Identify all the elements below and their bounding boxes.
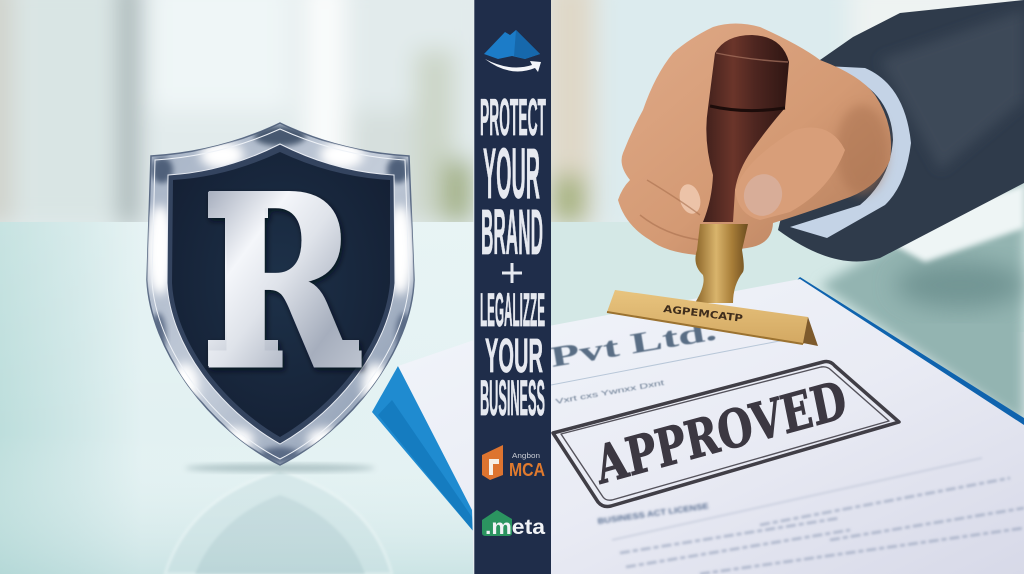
document: folder and paper: [372, 277, 1024, 574]
icon: blue mountain logo: [484, 30, 541, 72]
thumb: [735, 128, 845, 220]
logo: meta: [482, 510, 545, 539]
stamp base: AGPEMCATP: [663, 304, 743, 325]
infographic canvas: YOUR: [485, 330, 543, 383]
infographic canvas: YOUR: [483, 135, 540, 214]
heading: protect your brand: [480, 89, 546, 268]
infographic canvas: PROTECT: [480, 89, 546, 147]
approved stamp: APPROVED: [590, 369, 852, 497]
blue folder edge: [372, 366, 474, 532]
stamp handle: [703, 35, 789, 222]
paper sheet: [398, 279, 1024, 574]
logo: MCA: MCA: [509, 460, 545, 480]
sleeve and shirt cuff: [778, 0, 1024, 262]
infographic canvas: BRAND: [481, 196, 543, 268]
stamp base: [607, 290, 818, 346]
heading: legalize your business: [480, 283, 545, 426]
logo: MCA: Anɡbon: [512, 451, 540, 460]
document body text: [597, 458, 1024, 574]
logo: meta: .meta: [485, 516, 545, 539]
shield metal frame: [147, 123, 414, 465]
shield: [146, 123, 414, 472]
shield dark face: [167, 144, 395, 444]
company name: Pvt Ltd.: [548, 316, 719, 374]
infographic canvas: BUSINESS: [480, 370, 545, 426]
fine print under name: Vxrt cxs Ywnxx Dxnt: [555, 380, 665, 406]
hand holding stamp: [618, 24, 891, 303]
index fingernail: [676, 182, 704, 216]
logo: MCA: [482, 445, 545, 480]
infographic canvas: LEGALIZZE: [480, 283, 545, 336]
hand: [618, 24, 891, 255]
document body text: BUSINESS ACT LICENSE: [597, 501, 710, 526]
shield reflection on table: [165, 470, 392, 574]
letter R: R: [201, 143, 361, 422]
brass ferrule: [695, 224, 748, 303]
plus sign: [502, 263, 522, 283]
knuckle shadow: [836, 105, 888, 195]
thumbnail: [739, 170, 787, 220]
vertical title band: [473, 0, 551, 574]
